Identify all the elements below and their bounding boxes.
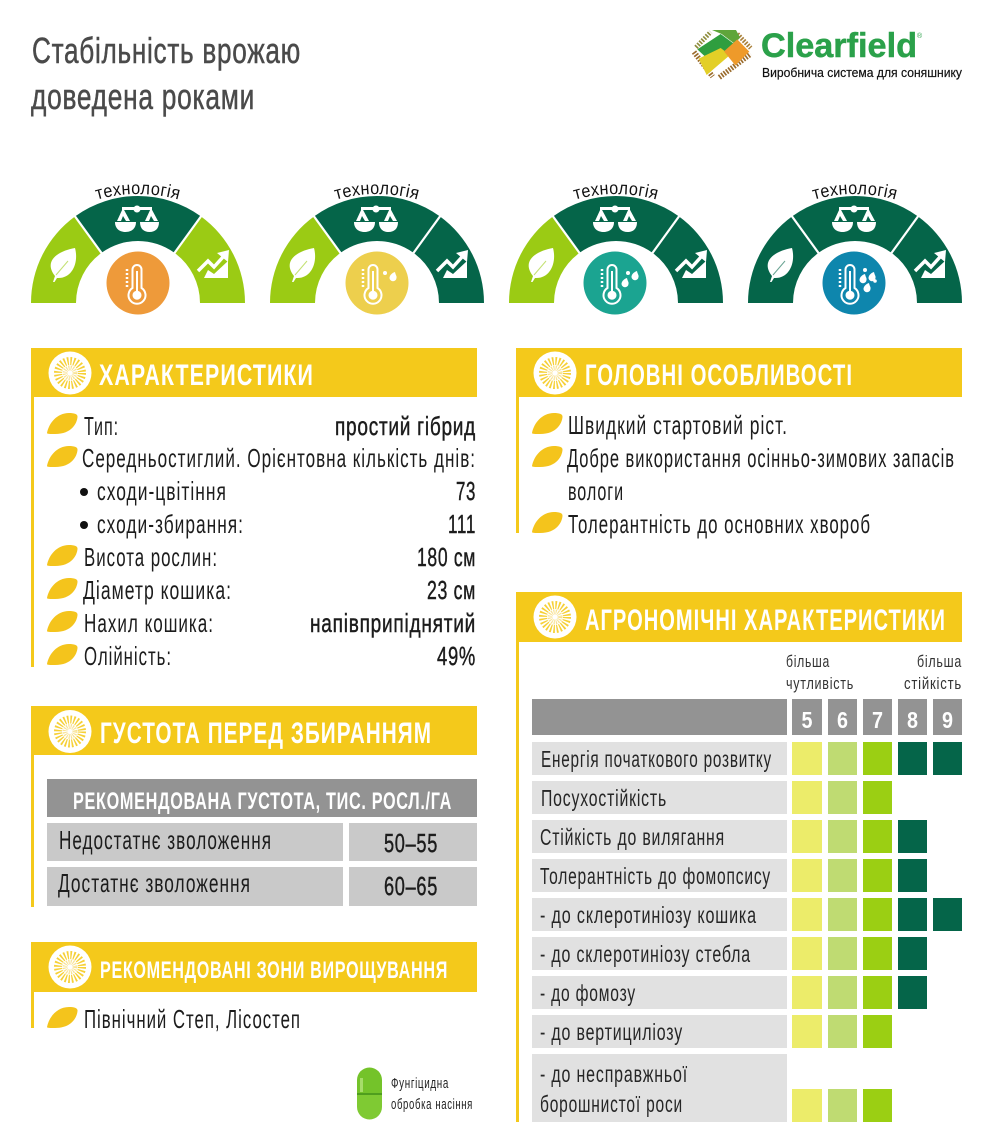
rating table (532, 699, 962, 1122)
panel border (31, 397, 34, 667)
row: олійність (47, 641, 476, 671)
row: до несправжньої борошнистої роси: борошнистої роси (540, 1091, 683, 1117)
table header with scale 5-9: 7 (872, 707, 883, 733)
row: діаметр кошика: 23 см (427, 575, 476, 605)
row: енергія початкового розвитку (532, 742, 962, 775)
gauge segments (509, 196, 723, 303)
panel: характеристики (31, 348, 477, 671)
item: толерантність до хвороб (532, 509, 871, 539)
row: нахил кошика (47, 608, 476, 638)
zones text (47, 1004, 301, 1034)
heading: РЕКОМЕНДОВАНІ ЗОНИ ВИРОЩУВАННЯ (100, 957, 448, 984)
logo tagline: Виробнича система для соняшнику (762, 65, 962, 80)
icon: growth chart (915, 250, 946, 278)
icon: thermometer with drops in yellow circle (346, 252, 408, 314)
heading: ХАРАКТЕРИСТИКИ (99, 359, 314, 392)
icon: growth chart (437, 250, 468, 278)
scale caption: більша стійкість (904, 652, 962, 693)
row: до фомозу (532, 976, 927, 1009)
icon: thermometer with drops in teal circle (584, 252, 646, 314)
legend: fungicide seed treatment (357, 1068, 473, 1120)
scale caption: більша стійкість: більша (917, 652, 962, 671)
row: нахил кошика: Нахил кошика: (84, 608, 214, 638)
icon: leaf (290, 248, 315, 282)
table header with scale 5-9 (532, 699, 962, 735)
panel: рекомендовані зони вирощування (31, 942, 477, 1034)
panel header bar (516, 592, 962, 642)
row: сходи-цвітіння: сходи-цвітіння (97, 476, 227, 506)
gauge 2: yellow, moderate moisture (270, 184, 484, 314)
icon: capsule (357, 1068, 382, 1120)
gauge segments (748, 196, 962, 303)
heading: ГУСТОТА ПЕРЕД ЗБИРАННЯМ (100, 717, 432, 750)
item: швидкий стартовий ріст (532, 410, 788, 440)
icon: growth chart (676, 250, 707, 278)
panel header bar (31, 706, 477, 755)
row: посухостійкість: Посухостійкість (541, 785, 667, 811)
row: недостатнє зволоження: Недостатнє зволоження (59, 825, 272, 855)
gauge segments (270, 196, 484, 303)
icon: growth chart (198, 250, 229, 278)
scale caption: більша стійкість: стійкість (904, 674, 962, 693)
row: сходи-збирання: 111 (448, 509, 476, 539)
scale caption: більша чутливість: чутливість (786, 674, 854, 693)
row: висота рослин (47, 542, 476, 572)
gauge separators (74, 215, 919, 255)
panel border (516, 642, 519, 1122)
title (31, 30, 301, 117)
logo wordmark: Clearfield (761, 27, 917, 65)
row: тип (47, 411, 476, 441)
icon: scales (832, 206, 876, 232)
row: олійність: Олійність: (84, 641, 172, 671)
icon: thermometer in orange circle (106, 252, 170, 314)
icon: leaf (529, 248, 554, 282)
row: до фомозу: - до фомозу (540, 980, 636, 1006)
table header with scale 5-9: 5 (802, 707, 813, 733)
gauge label: технологія (334, 184, 419, 200)
icon: sunflower (534, 352, 576, 394)
row: енергія початкового розвитку: Енергія початкового розвитку (541, 746, 772, 772)
panel border (31, 992, 34, 1028)
row: до склеротиніозу стебла: - до склеротиніозу стебла (540, 941, 751, 967)
item: використання запасів вологи (532, 443, 955, 506)
gauge 3: teal, good moisture (509, 184, 723, 314)
row: середньостиглий: Середньостиглий. Орієнтовна кількість днів: (82, 443, 476, 473)
row: толерантність до фомопсису (532, 859, 927, 892)
row: до несправжньої борошнистої роси (532, 1054, 892, 1122)
row: недостатнє зволоження (47, 823, 477, 861)
panel header bar (516, 348, 962, 397)
icon: leaf (768, 248, 793, 282)
icon: sunflower (48, 352, 92, 394)
panel header bar (31, 942, 477, 992)
icon: woven diamond mark (694, 30, 751, 77)
gauge label: технологія (572, 184, 658, 200)
icon: sunflower (48, 710, 92, 753)
row: до вертициліозу (532, 1015, 892, 1048)
row: висота рослин: Висота рослин: (84, 542, 218, 572)
gauge label: технологія (812, 184, 897, 200)
icon: scales (115, 206, 159, 232)
row: діаметр кошика (47, 575, 476, 605)
item: швидкий стартовий ріст: Швидкий стартовий ріст. (568, 410, 788, 440)
panel: головні особливості (516, 348, 962, 539)
icon: scales (354, 206, 398, 232)
table header with scale 5-9: 8 (907, 707, 918, 733)
table header (47, 779, 477, 817)
title: Стабільність врожаю (32, 30, 301, 71)
row: достатнє зволоження: Достатнє зволоження (58, 868, 251, 898)
gauge 4: blue, high moisture (748, 184, 962, 314)
row: тип: Тип: (84, 411, 119, 441)
row: сходи-збирання (80, 509, 476, 539)
row: до несправжньої борошнистої роси: - до несправжньої (540, 1061, 688, 1087)
icon: sunflower (48, 946, 92, 988)
item: використання запасів вологи: вологи (568, 476, 624, 506)
row: нахил кошика: напівприпіднятий (310, 608, 476, 638)
legend text: Фунгіцидна (391, 1075, 449, 1092)
table header with scale 5-9: 6 (837, 707, 848, 733)
table header with scale 5-9: 9 (942, 707, 953, 733)
row: достатнє зволоження: 60–65 (384, 871, 438, 901)
row: діаметр кошика: Діаметр кошика: (83, 575, 232, 605)
row: стійкість до вилягання (532, 820, 927, 853)
row: олійність: 49% (437, 641, 476, 671)
icon: sunflower (534, 596, 576, 638)
row: до вертициліозу: - до вертициліозу (540, 1019, 683, 1045)
panel border (31, 755, 34, 907)
row: сходи-цвітіння: 73 (456, 476, 476, 506)
heading: ГОЛОВНІ ОСОБЛИВОСТІ (585, 359, 853, 392)
row: недостатнє зволоження: 50–55 (384, 828, 438, 858)
title: доведена роками (31, 76, 255, 117)
icon: thermometer with drops in blue circle (822, 252, 886, 314)
registered mark: ® (917, 32, 923, 40)
zones text: Північний Степ, Лісостеп (84, 1004, 301, 1034)
gauge 1: orange, dry conditions (31, 184, 245, 314)
row: достатнє зволоження (47, 867, 477, 906)
panel border (516, 397, 519, 533)
row: сходи-цвітіння (80, 476, 476, 506)
row: тип: простий гібрид (335, 411, 476, 441)
scale caption: більша чутливість: більша (786, 652, 830, 671)
panel: агрономічні характеристики (516, 592, 962, 1122)
row: толерантність до фомопсису: Толерантність до фомопсису (540, 863, 771, 889)
scale caption: більша чутливість (786, 652, 854, 693)
table header: РЕКОМЕНДОВАНА ГУСТОТА, ТИС. РОСЛ./ГА (73, 788, 452, 815)
row: сходи-збирання: сходи-збирання: (97, 509, 244, 539)
icon: scales (593, 206, 637, 232)
panel: густота перед збиранням (31, 706, 477, 907)
gauge label: технологія (94, 184, 180, 200)
row: посухостійкість (532, 781, 892, 814)
panel header bar (31, 348, 477, 397)
row: середньостиглий (47, 443, 476, 473)
row: стійкість до вилягання: Стійкість до вилягання (540, 824, 725, 850)
density table (47, 779, 477, 906)
row: до склеротиніозу кошика: - до склеротиніозу кошика (540, 902, 757, 928)
row: до склеротиніозу стебла (532, 937, 927, 970)
logo: Clearfield (694, 27, 962, 80)
icon: leaf (51, 248, 76, 282)
row: до склеротиніозу кошика (532, 898, 962, 931)
row: висота рослин: 180 см (417, 542, 476, 572)
legend: fungicide seed treatment: обробка насіння (391, 1096, 473, 1113)
gauge segments (31, 196, 245, 303)
